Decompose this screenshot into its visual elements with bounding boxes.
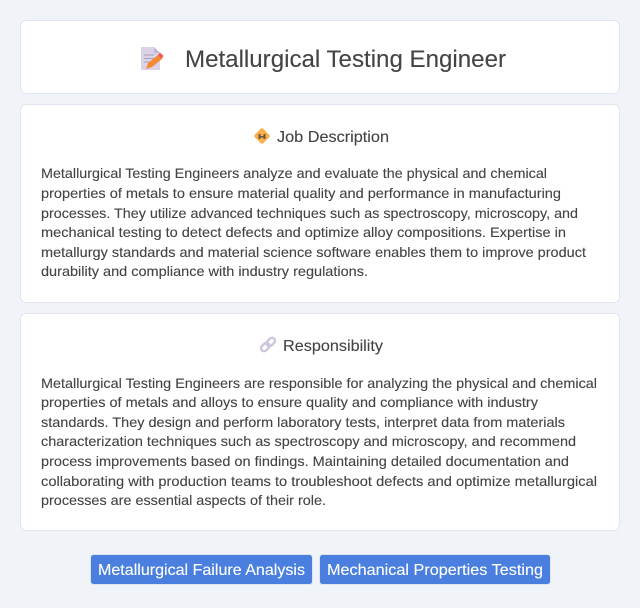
text block: responsibility: standards. They design and perform laboratory tests, interpret data from materials [41,414,565,430]
panel: responsibility [20,314,620,530]
tag: mechanical properties testing: Mechanical Properties Testing [327,562,543,579]
icon: memo with pencil [141,47,164,70]
text block: responsibility: collaborating with production teams to troubleshoot defects and optimize metallurgical [41,473,597,489]
text block: job description: processes. They utilize advanced techniques such as spectroscopy, microscopy, and [41,205,578,221]
title: Metallurgical Testing Engineer [185,46,506,73]
panel: job description [20,104,620,302]
icon: link [260,337,276,352]
text block: job description: properties of metals to ensure material quality and performance in manufacturing [41,185,561,201]
tag: mechanical properties testing [320,554,550,584]
text block: responsibility: process improvements based on findings. Maintaining detailed documentation and [41,453,569,469]
text block: responsibility: processes are essential aspects of their role. [41,492,326,508]
text block: responsibility [41,375,597,508]
text block: job description: mechanical testing to detect defects and optimize alloy compositions. Expertise in [41,224,566,240]
text block: job description [41,165,586,279]
panel: title card [20,20,620,94]
tag: metallurgical failure analysis [90,554,312,584]
text block: responsibility: characterization techniques such as spectroscopy and microscopy, and recommend [41,433,576,449]
heading: job description: Job Description [277,129,389,146]
text block: job description: metallurgy standards and material science software enables them to improve product [41,244,586,260]
heading: responsibility: Responsibility [283,338,383,355]
text block: job description: durability and compliance with industry regulations. [41,263,368,279]
icon: diamond sign [254,128,270,144]
text block: responsibility: Metallurgical Testing Engineers are responsible for analyzing the physical and chemical [41,375,597,391]
tag: metallurgical failure analysis: Metallurgical Failure Analysis [98,562,305,579]
text block: job description: Metallurgical Testing Engineers analyze and evaluate the physical and chemical [41,165,547,181]
text block: responsibility: properties of metals and alloys to ensure quality and compliance with industry [41,394,538,410]
